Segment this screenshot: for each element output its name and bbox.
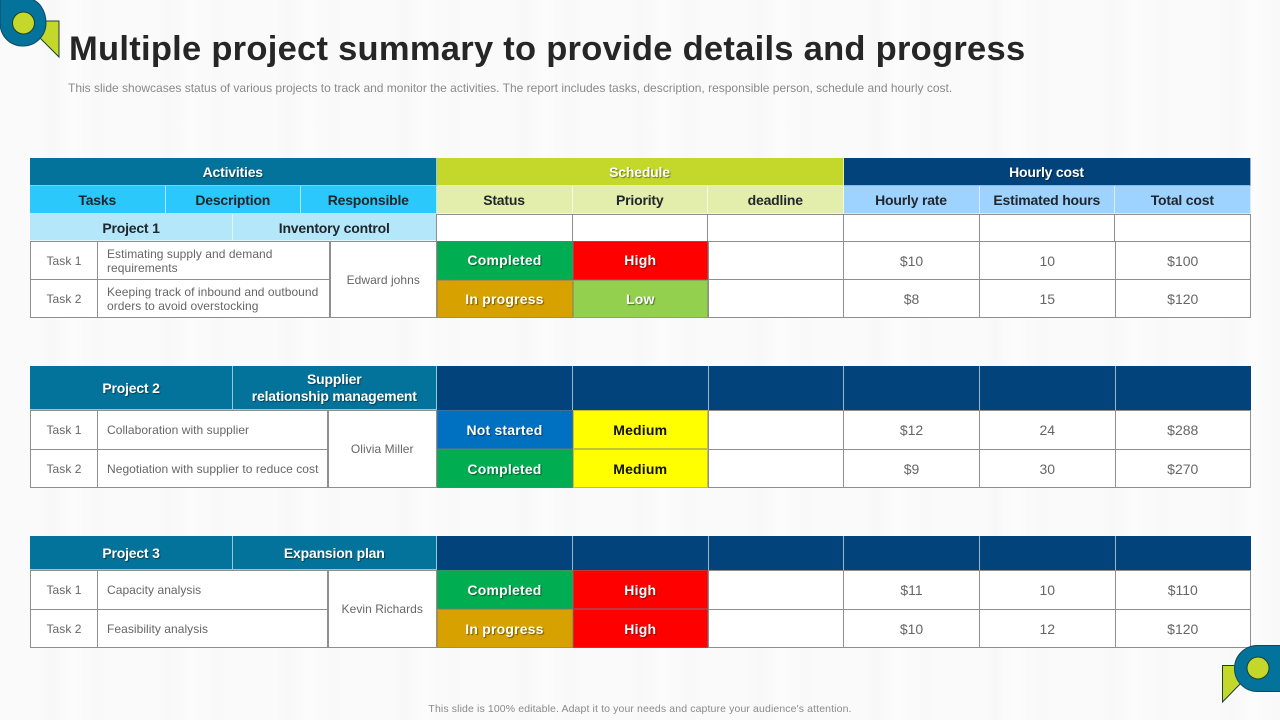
- column header: deadline: [708, 186, 844, 214]
- status: completed: Completed: [467, 252, 542, 268]
- total: $100: [1114, 241, 1251, 280]
- rate: $8: [843, 279, 980, 318]
- total: $270: [1114, 449, 1251, 488]
- deadline cell 2: [708, 609, 844, 648]
- rate: $11: $11: [900, 582, 923, 598]
- deadline cell 2: [708, 279, 844, 318]
- hours: 24: 24: [1039, 422, 1055, 438]
- hours: 10: 10: [1039, 252, 1055, 268]
- column header: description: Description: [195, 192, 270, 208]
- heading: activities: Activities: [203, 164, 263, 180]
- responsible person: [328, 570, 437, 648]
- column header: priority: Priority: [616, 192, 663, 208]
- task 2 label: Task 2: [46, 292, 81, 306]
- task 1 label: [30, 241, 98, 280]
- task 2 description: Negotiation with supplier to reduce cost: [107, 462, 318, 476]
- project 2 label: Project 2: [102, 380, 160, 396]
- status: completed: [436, 449, 572, 488]
- column header: deadline: deadline: [748, 192, 803, 208]
- task 2 description: [97, 609, 328, 648]
- total: $110: [1114, 570, 1251, 610]
- priority: high: [572, 609, 708, 648]
- column header: responsible: [301, 186, 436, 214]
- column header: tasks: [30, 186, 166, 214]
- hours: 30: [979, 449, 1116, 488]
- heading: activities: [30, 158, 436, 186]
- subtitle: This slide showcases status of various projects to track and monitor the activities. The report includes tasks, description, responsible person, schedule and hourly cost.: [68, 81, 952, 95]
- icon: bottom-right logo: [1222, 645, 1280, 704]
- task 2 label: Task 2: [46, 622, 81, 636]
- status: not started: [436, 410, 572, 449]
- heading: hourly cost: Hourly cost: [1009, 164, 1084, 180]
- hours: 10: 10: [1039, 582, 1055, 598]
- priority: medium: Medium: [613, 460, 667, 476]
- deadline cell 1: [708, 410, 844, 450]
- project 2 name: [233, 366, 436, 410]
- task 2 label: [30, 279, 98, 318]
- priority: high: High: [624, 252, 656, 268]
- deadline cell 1: [708, 241, 844, 280]
- column header: priority: [572, 186, 708, 214]
- navy header band: [436, 536, 1250, 570]
- heading: schedule: Schedule: [609, 164, 670, 180]
- project 1 label: [30, 214, 233, 241]
- project 2 name: Supplier: [307, 371, 361, 387]
- heading: hourly cost: [844, 158, 1250, 186]
- rate: $8: $8: [904, 290, 919, 306]
- status: completed: Completed: [467, 582, 542, 598]
- responsible person: [330, 241, 437, 318]
- column header: hourly rate: [844, 186, 980, 214]
- responsible person: Edward johns: [347, 272, 420, 286]
- task 1 description: Capacity analysis: [107, 583, 201, 597]
- icon: top-left logo: [0, 0, 60, 58]
- total: $100: $100: [1167, 252, 1198, 268]
- rate: $12: $12: [900, 422, 923, 438]
- hours: 24: [979, 410, 1116, 450]
- total: $120: [1114, 609, 1251, 648]
- hours: 10: [979, 241, 1116, 280]
- task 1 label: Task 1: [46, 583, 81, 597]
- priority: high: High: [624, 620, 656, 636]
- column header: description: [166, 186, 301, 214]
- task 1 description: [97, 570, 328, 610]
- navy header band: [436, 366, 1250, 410]
- task 2 description: [97, 449, 328, 488]
- priority: high: High: [624, 582, 656, 598]
- deadline cell 2: [708, 449, 844, 488]
- task 2 label: [30, 609, 98, 648]
- task 1 label: [30, 570, 98, 610]
- hours: 12: 12: [1039, 620, 1055, 636]
- priority: medium: [572, 449, 708, 488]
- column header: tasks: Tasks: [78, 192, 116, 208]
- responsible person: Olivia Miller: [351, 442, 414, 456]
- column header: status: [436, 186, 572, 214]
- rate: $12: [843, 410, 980, 450]
- priority: medium: Medium: [613, 422, 667, 438]
- priority: low: Low: [626, 291, 655, 307]
- hours: 10: [979, 570, 1116, 610]
- task 2 description: Keeping track of inbound and outbound: [107, 285, 318, 299]
- project 3 label: Project 3: [102, 545, 160, 561]
- total: $270: $270: [1167, 460, 1198, 476]
- project 2 name: relationship management: [252, 388, 417, 404]
- task 2 description: Feasibility analysis: [107, 622, 208, 636]
- task 2 description: [97, 279, 330, 318]
- column header: total cost: [1115, 186, 1250, 214]
- project 3 name: Expansion plan: [284, 545, 385, 561]
- status: completed: Completed: [467, 460, 542, 476]
- rate: $10: $10: [900, 252, 923, 268]
- rate: $11: [843, 570, 980, 610]
- priority: low: [572, 280, 708, 318]
- hours: 30: 30: [1039, 460, 1055, 476]
- task 1 description: Estimating supply and demand: [107, 247, 272, 261]
- rate: $9: $9: [904, 460, 919, 476]
- panel: project 2 table: [30, 366, 1251, 488]
- hours: 12: [979, 609, 1116, 648]
- column header: estimated hours: Estimated hours: [993, 192, 1100, 208]
- total: $120: $120: [1167, 290, 1198, 306]
- project 1 name: [233, 214, 436, 241]
- rate: $10: [843, 241, 980, 280]
- total: $120: $120: [1167, 620, 1198, 636]
- column header: total cost: Total cost: [1151, 192, 1214, 208]
- status: in progress: In progress: [465, 620, 544, 636]
- status: in progress: [436, 609, 572, 648]
- priority: high: [572, 570, 708, 609]
- total: $120: [1114, 279, 1251, 318]
- heading: schedule: [436, 158, 844, 186]
- hours: 15: [979, 279, 1116, 318]
- project 1 label: Project 1: [102, 220, 160, 236]
- responsible person: Kevin Richards: [342, 602, 423, 616]
- task 1 description: [97, 241, 330, 280]
- task 1 label: Task 1: [46, 254, 81, 268]
- task 1 label: [30, 410, 98, 450]
- priority: medium: [572, 410, 708, 449]
- project 1 name: Inventory control: [279, 220, 390, 236]
- task 2 label: [30, 449, 98, 488]
- task 1 label: Task 1: [46, 423, 81, 437]
- empty row: [436, 214, 1251, 241]
- task 1 description: requirements: [107, 261, 178, 275]
- task 2 label: Task 2: [46, 462, 81, 476]
- rate: $9: [843, 449, 980, 488]
- column header: responsible: Responsible: [328, 192, 409, 208]
- column header: hourly rate: Hourly rate: [875, 192, 947, 208]
- rate: $10: $10: [900, 620, 923, 636]
- task 1 description: Collaboration with supplier: [107, 423, 249, 437]
- rate: $10: [843, 609, 980, 648]
- status: completed: [436, 570, 572, 609]
- task 2 description: orders to avoid overstocking: [107, 299, 258, 313]
- hours: 15: 15: [1039, 290, 1055, 306]
- panel: project 3 table: [30, 536, 1251, 648]
- task 1 description: [97, 410, 328, 450]
- column header: estimated hours: [980, 186, 1115, 214]
- project 3 name: [233, 536, 436, 570]
- status: not started: Not started: [466, 422, 543, 438]
- project 2 label: [30, 366, 233, 410]
- responsible person: [328, 410, 437, 488]
- status: completed: [436, 241, 572, 280]
- deadline cell 1: [708, 570, 844, 610]
- title: Multiple project summary to provide details and progress: [69, 30, 1025, 68]
- priority: high: [572, 241, 708, 280]
- project 3 label: [30, 536, 233, 570]
- total: $288: $288: [1167, 422, 1198, 438]
- panel: project 1 table: [30, 158, 1251, 318]
- status: in progress: In progress: [465, 291, 544, 307]
- column header: status: Status: [483, 192, 525, 208]
- total: $110: $110: [1168, 582, 1198, 598]
- footer note: This slide is 100% editable. Adapt it to your needs and capture your audience's attention.: [428, 703, 852, 715]
- total: $288: [1114, 410, 1251, 450]
- status: in progress: [436, 280, 572, 318]
